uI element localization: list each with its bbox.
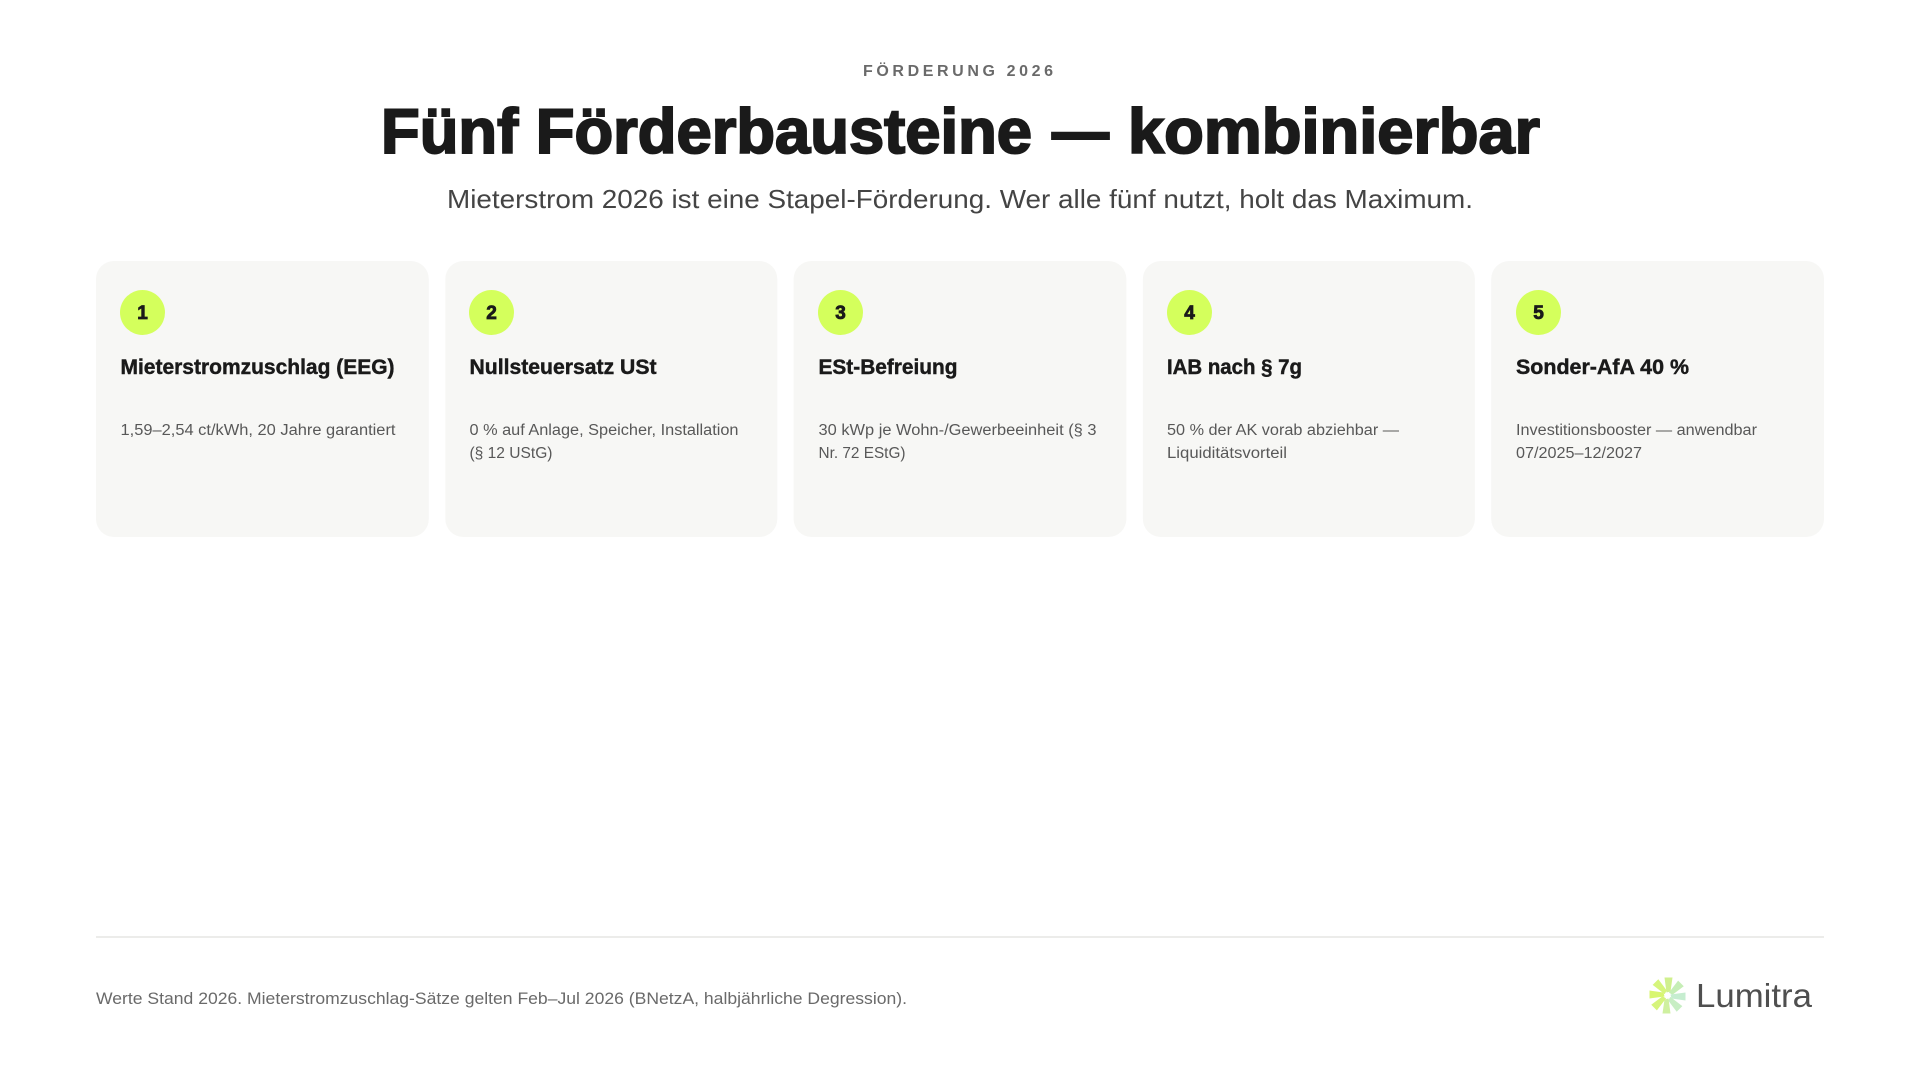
card 4 description: Liquiditätsvorteil	[1167, 445, 1287, 462]
card 4 description: 50 % der AK vorab abziehbar —	[1167, 422, 1400, 439]
card 1 heading: Mieterstromzuschlag (EEG)	[120, 355, 394, 379]
card 5 description	[1516, 422, 1757, 462]
title: kombinierbar	[1128, 97, 1540, 167]
card 3 description	[818, 422, 1096, 462]
card 5 description: 07/2025–12/2027	[1516, 445, 1642, 462]
icon: pinwheel mark	[1650, 978, 1686, 1014]
footnote: Werte Stand 2026. Mieterstromzuschlag-Sätze gelten Feb–Jul 2026 (BNetzA, halbjährliche Degression).	[96, 990, 907, 1008]
number badge 5	[1516, 290, 1561, 335]
wordmark: Lumitra	[1696, 977, 1813, 1014]
card 3 description: Nr. 72 EStG)	[818, 445, 906, 462]
title: Fünf Förderbausteine	[381, 97, 1032, 167]
card 2 description: 0 % auf Anlage, Speicher, Installation	[470, 422, 738, 439]
card 4 heading: IAB nach § 7g	[1167, 355, 1302, 379]
panel: card 5	[1491, 261, 1824, 537]
title	[381, 97, 1540, 167]
panel: card 4	[1143, 261, 1475, 537]
number badge 2	[469, 290, 514, 335]
number badge 3	[818, 290, 863, 335]
panel: card 1	[96, 261, 429, 537]
eyebrow: FÖRDERUNG 2026	[863, 61, 1055, 80]
card 5 description: Investitionsbooster — anwendbar	[1516, 422, 1757, 439]
panel: card 3	[794, 261, 1126, 537]
panel: card 2	[445, 261, 777, 537]
logo: Lumitra	[1650, 977, 1813, 1014]
number badge 4: 4	[1184, 303, 1195, 324]
card 1 description: 1,59–2,54 ct/kWh, 20 Jahre garantiert	[120, 422, 396, 439]
card 4 description	[1167, 422, 1400, 462]
card 3 description: 30 kWp je Wohn-/Gewerbeeinheit (§ 3	[818, 422, 1096, 439]
number badge 1: 1	[137, 303, 148, 324]
card 5 heading: Sonder-AfA 40 %	[1516, 355, 1689, 379]
card 2 heading: Nullsteuersatz USt	[470, 355, 656, 379]
number badge 4	[1167, 290, 1212, 335]
card 2 description	[470, 422, 738, 462]
card 3 heading: ESt-Befreiung	[818, 355, 958, 379]
number badge 3: 3	[835, 303, 846, 324]
card 2 description: (§ 12 UStG)	[470, 445, 552, 462]
number badge 2: 2	[486, 303, 497, 324]
title: —	[1052, 97, 1109, 167]
number badge 5: 5	[1533, 303, 1544, 324]
subtitle: Mieterstrom 2026 ist eine Stapel-Förderung. Wer alle fünf nutzt, holt das Maximum.	[447, 184, 1473, 214]
number badge 1	[120, 290, 165, 335]
